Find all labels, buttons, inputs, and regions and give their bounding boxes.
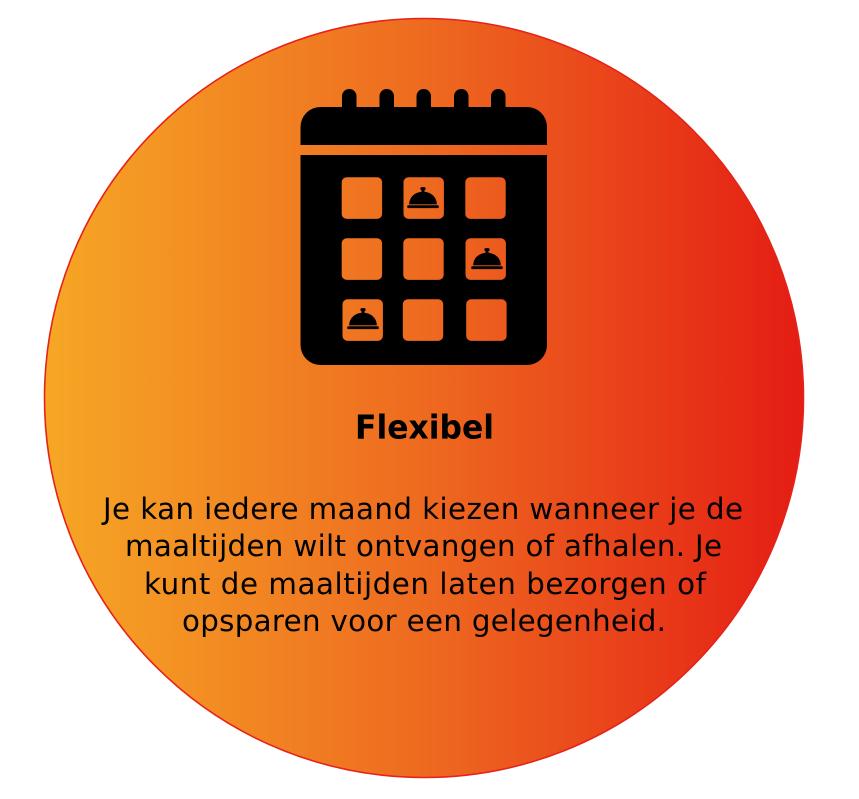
heading: Flexibel [355,408,494,446]
icon: cloche 3 [347,308,379,329]
calendar header [300,107,547,145]
body text: opsparen voor een gelegenheid. [182,604,666,638]
icon: cloche 2 [471,248,503,269]
calendar day tiles [342,177,507,341]
body text: Je kan iedere maand kiezen wanneer je de [101,492,743,526]
icon: cloche 1 [407,187,439,208]
icon: calendar with meal cloches [300,89,547,365]
calendar rings [342,89,506,119]
calendar body [300,155,547,365]
body text: kunt de maaltijden laten bezorgen of [144,567,707,601]
body text [101,492,743,638]
body text: maaltijden wilt ontvangen of afhalen. Je [125,529,722,563]
